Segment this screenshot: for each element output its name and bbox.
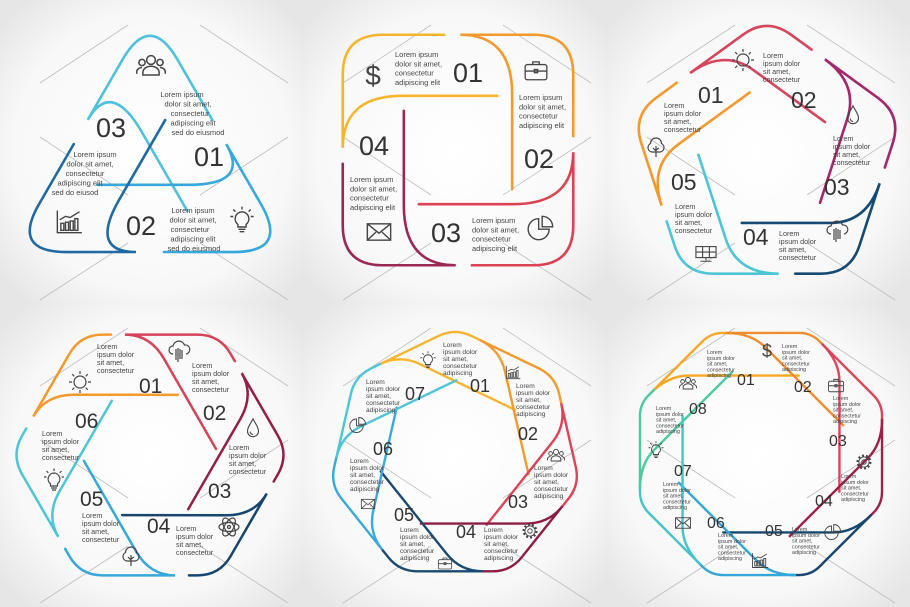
number 04: 04 xyxy=(147,515,171,538)
text block 02: ipsum dolor xyxy=(192,369,230,378)
number 07: 07 xyxy=(674,463,692,480)
text block 02: Lorem ipsum xyxy=(519,93,562,102)
text block 01: consectetur xyxy=(395,69,434,78)
text block 01: consectetur xyxy=(97,366,135,375)
text block 08: ipsum dolor xyxy=(656,412,684,418)
segment 02 orange xyxy=(710,305,870,425)
number 03: 03 xyxy=(508,492,528,512)
text block 04: ipsum dolor xyxy=(484,534,519,541)
text block 04: Lorem xyxy=(675,202,695,211)
text block 08: sit amet, xyxy=(656,418,677,424)
segment 08 green xyxy=(612,345,732,505)
text block 07: sit amet, xyxy=(366,393,391,400)
text block 02: ipsum dolor xyxy=(782,350,810,356)
text block 02: dolor sit amet, xyxy=(169,216,217,224)
text block 08: adipiscing xyxy=(656,429,680,435)
number 03: 03 xyxy=(208,480,231,503)
text block 02: sed do eiusmod xyxy=(168,244,220,253)
panel: pentagon cycle xyxy=(617,26,910,312)
segment 04 maroon xyxy=(421,465,577,594)
number 07: 07 xyxy=(405,384,425,404)
icon: sun xyxy=(732,49,754,71)
segment 01 orange xyxy=(12,312,178,463)
text block 03: adipiscing xyxy=(534,493,564,500)
text block 06: consectetur xyxy=(42,453,80,462)
text block 01: Lorem xyxy=(97,342,117,351)
segment 05 orange xyxy=(617,63,750,221)
text block 03: adipiscing elit xyxy=(57,178,103,188)
text block 08: consectetur xyxy=(656,423,684,429)
segment 04 navy xyxy=(122,447,288,598)
icon: briefcase xyxy=(438,558,452,569)
panel: square cycle xyxy=(296,0,620,312)
text block 02: ipsum dolor xyxy=(516,390,551,397)
segment 02 red xyxy=(98,298,264,449)
text block 05: sit amet, xyxy=(792,539,813,545)
number 01: 01 xyxy=(698,82,724,108)
number 04: 04 xyxy=(743,224,769,250)
text block 02: adipiscing elit xyxy=(170,234,216,244)
number 05: 05 xyxy=(765,523,783,540)
text block 04: ipsum dolor xyxy=(176,532,214,541)
number 06: 06 xyxy=(707,515,725,532)
text block 06: consectetur xyxy=(350,479,385,486)
text block 04: dolor sit amet, xyxy=(350,184,397,193)
segment 02 orange xyxy=(444,320,589,474)
number 02: 02 xyxy=(203,402,226,425)
text block 07: ipsum dolor xyxy=(663,488,691,494)
text block 05: ipsum dolor xyxy=(400,534,435,541)
text block 04: consectetur xyxy=(841,491,869,497)
segment 04 cyan xyxy=(642,155,807,312)
text block 02: consectetur xyxy=(171,225,210,234)
icon: solar panel xyxy=(696,247,716,261)
icon: chart xyxy=(57,210,82,233)
text block 08: Lorem xyxy=(656,406,672,412)
text block 02: dolor sit amet, xyxy=(519,102,566,111)
text block 06: Lorem xyxy=(42,429,62,438)
text block 01: adipiscing elit xyxy=(170,118,216,128)
text block 04: sit amet, xyxy=(675,218,702,227)
text block 03: Lorem xyxy=(779,229,799,238)
icon: chart xyxy=(752,553,768,568)
number 01: 01 xyxy=(139,375,162,398)
text block 05: ipsum dolor xyxy=(664,109,702,118)
icon: bulb xyxy=(420,351,436,368)
number 02: 02 xyxy=(524,144,554,174)
text block 01: Lorem xyxy=(443,342,462,349)
icon: dollar: $ xyxy=(365,60,381,91)
icon: atom xyxy=(219,516,239,538)
icon: drop xyxy=(848,106,858,124)
text block 04: sit amet, xyxy=(484,541,509,548)
text block 06: adipiscing xyxy=(718,556,742,562)
text block 03: ipsum dolor xyxy=(833,402,861,408)
text block 07: consectetur xyxy=(366,400,401,407)
text block 03: ipsum dolor xyxy=(779,237,817,246)
text block 02: consectetur xyxy=(516,404,551,411)
segment 03 red xyxy=(784,332,905,492)
text block 04: Lorem ipsum xyxy=(350,175,393,184)
text block 04: adipiscing xyxy=(484,555,514,562)
text block 02: Lorem xyxy=(782,344,798,350)
icon: bulb xyxy=(230,207,254,232)
text block 07: adipiscing xyxy=(366,407,396,414)
text block 01: consectetur xyxy=(707,367,735,373)
text block 03: consectetur xyxy=(779,253,817,262)
icon: pie xyxy=(350,418,366,432)
segment 03 red xyxy=(487,393,593,542)
text block 01: consectetur xyxy=(171,109,210,118)
icon: gear xyxy=(858,456,870,468)
text block 05: adipiscing xyxy=(792,550,816,556)
text block 07: consectetur xyxy=(663,499,691,505)
text block 03: dolor sit amet, xyxy=(66,160,114,168)
text block 03: consectetur xyxy=(229,467,267,476)
number 02: 02 xyxy=(518,424,538,444)
icon: envelope xyxy=(676,518,690,528)
segment 01 light blue xyxy=(88,36,212,211)
icon: gear xyxy=(524,525,536,537)
text block 01: adipiscing xyxy=(443,370,473,377)
text block 02: Lorem ipsum xyxy=(171,206,215,215)
text block 05: consectetur xyxy=(82,535,120,544)
text block 06: consectetur xyxy=(718,550,746,556)
text block 05: Lorem xyxy=(792,527,808,533)
text block 04: consectetur xyxy=(176,548,214,557)
number 02: 02 xyxy=(791,87,817,113)
text block 06: sit amet, xyxy=(718,545,739,551)
text block 02: adipiscing xyxy=(516,411,546,418)
text block 06: sit amet, xyxy=(42,445,69,454)
text block 01: adipiscing xyxy=(707,373,731,379)
number 03: 03 xyxy=(431,218,461,248)
text block 03: Lorem xyxy=(534,465,553,472)
text block 01: ipsum dolor xyxy=(763,59,801,68)
text block 04: Lorem xyxy=(841,474,857,480)
text block 06: Lorem xyxy=(718,533,734,539)
number 06: 06 xyxy=(75,410,98,433)
segment 04 maroon xyxy=(302,107,507,312)
number 08: 08 xyxy=(689,401,707,418)
icon: tree xyxy=(648,138,664,157)
text block 03: sit amet, xyxy=(534,479,559,486)
text block 05: sit amet, xyxy=(400,541,425,548)
text block 03: Lorem ipsum xyxy=(472,216,515,225)
text block 07: ipsum dolor xyxy=(366,386,401,393)
icon: bulb xyxy=(44,468,64,490)
text block 04: Lorem xyxy=(484,527,503,534)
text block 05: consectetur xyxy=(400,548,435,555)
text block 02: adipiscing xyxy=(782,367,806,373)
icon: briefcase xyxy=(525,62,547,80)
segment 03 red xyxy=(415,101,620,306)
text block 04: consectetur xyxy=(350,194,389,203)
text block 01: sed do eiusmod xyxy=(172,128,224,137)
text block 01: dolor sit amet, xyxy=(164,100,212,108)
icon: bulb xyxy=(648,441,664,458)
text block 05: Lorem xyxy=(664,101,684,110)
icon: envelope xyxy=(367,224,391,240)
text block 02: sit amet, xyxy=(782,356,803,362)
icon: chart xyxy=(506,366,520,379)
number 01: 01 xyxy=(194,142,224,172)
text block 04: sit amet, xyxy=(176,540,203,549)
icon: people xyxy=(679,377,697,389)
number 02: 02 xyxy=(794,379,812,396)
text block 02: Lorem xyxy=(516,383,535,390)
text block 05: consectetur xyxy=(664,125,702,134)
text block 05: ipsum dolor xyxy=(792,533,820,539)
panel: heptagon cycle xyxy=(311,320,593,600)
text block 02: consectetur xyxy=(782,361,810,367)
segment 07 cyan xyxy=(617,416,738,576)
panel: triangle cycle xyxy=(1,36,299,294)
text block 01: sit amet, xyxy=(763,67,790,76)
text block 03: sit amet, xyxy=(833,408,854,414)
segment 01 yellow xyxy=(296,0,501,199)
icon: cloud xyxy=(169,341,190,362)
number 04: 04 xyxy=(815,493,833,510)
text block 04: consectetur xyxy=(484,548,519,555)
text block 03: Lorem xyxy=(229,443,249,452)
text block 07: Lorem xyxy=(663,482,679,488)
text block 03: sit amet, xyxy=(779,245,806,254)
text block 02: Lorem xyxy=(833,134,853,143)
text block 04: sit amet, xyxy=(841,486,862,492)
text block 02: sit amet, xyxy=(833,150,860,159)
segment 05 blue xyxy=(36,461,202,607)
text block 03: consectetur xyxy=(833,413,861,419)
text block 06: ipsum dolor xyxy=(42,437,80,446)
text block 02: consectetur xyxy=(833,158,871,167)
text block 02: consectetur xyxy=(519,112,558,121)
text block 01: Lorem ipsum xyxy=(395,50,438,59)
text block 02: adipiscing elit xyxy=(519,121,565,130)
text block 05: Lorem xyxy=(400,527,419,534)
number 04: 04 xyxy=(456,522,476,542)
text block 01: sit amet, xyxy=(97,358,124,367)
text block 01: ipsum dolor xyxy=(97,350,135,359)
icon: sun xyxy=(69,371,91,393)
text block 04: ipsum dolor xyxy=(675,210,713,219)
text block 06: adipiscing xyxy=(350,486,380,493)
text block 04: ipsum dolor xyxy=(841,480,869,486)
icon: cloud rain xyxy=(827,221,848,242)
text block 04: Lorem xyxy=(176,524,196,533)
text block 01: sit amet, xyxy=(443,356,468,363)
icon: dollar: $ xyxy=(762,341,772,361)
number 01: 01 xyxy=(453,58,483,88)
segment 01 yellow xyxy=(639,310,799,431)
segment 06 cyan xyxy=(16,401,112,537)
icon: envelope xyxy=(361,499,375,509)
text block 03: Lorem xyxy=(833,396,849,402)
text block 02: ipsum dolor xyxy=(833,142,871,151)
segment 06 blue xyxy=(321,408,427,557)
text block 05: adipiscing xyxy=(400,555,430,562)
number 05: 05 xyxy=(80,488,103,511)
number 03: 03 xyxy=(829,433,847,450)
text block 03: consectetur xyxy=(534,486,569,493)
text block 01: Lorem xyxy=(763,51,783,60)
text block 06: ipsum dolor xyxy=(350,465,385,472)
text block 03: adipiscing xyxy=(833,419,857,425)
text block 03: sit amet, xyxy=(229,459,256,468)
icon: briefcase xyxy=(828,379,844,392)
text block 02: sit amet, xyxy=(192,377,219,386)
text block 07: Lorem xyxy=(366,379,385,386)
number 03: 03 xyxy=(824,174,850,200)
number 06: 06 xyxy=(373,439,393,459)
text block 05: sit amet, xyxy=(664,117,691,126)
icon: drop xyxy=(248,419,258,437)
text block 05: Lorem xyxy=(82,511,102,520)
text block 04: adipiscing xyxy=(841,497,865,503)
text block 01: ipsum dolor xyxy=(443,349,478,356)
text block 05: ipsum dolor xyxy=(82,519,120,528)
segment 01 red xyxy=(690,26,825,122)
number 04: 04 xyxy=(359,131,389,161)
segment 03 maroon xyxy=(188,373,284,509)
text block 05: consectetur xyxy=(792,544,820,550)
panel: hexagon cycle xyxy=(12,298,288,607)
text block 01: consectetur xyxy=(443,363,478,370)
text block 02: consectetur xyxy=(192,385,230,394)
text block 03: consectetur xyxy=(66,169,105,178)
text block 03: Lorem ipsum xyxy=(73,150,117,159)
text block 02: sit amet, xyxy=(516,397,541,404)
text block 06: sit amet, xyxy=(350,472,375,479)
icon: people xyxy=(137,56,165,75)
text block 01: dolor sit amet, xyxy=(395,59,442,68)
number 01: 01 xyxy=(737,372,755,389)
number 05: 05 xyxy=(394,505,414,525)
segment 07 cyan xyxy=(311,332,456,486)
number 02: 02 xyxy=(126,211,156,241)
segment 05 navy xyxy=(347,471,503,600)
text block 06: Lorem xyxy=(350,458,369,465)
text block 04: consectetur xyxy=(675,226,713,235)
text block 01: consectetur xyxy=(763,75,801,84)
segment 04 maroon xyxy=(790,403,910,563)
text block 03: ipsum dolor xyxy=(229,451,267,460)
text block 01: adipiscing elit xyxy=(395,78,441,87)
text block 01: sit amet, xyxy=(707,362,728,368)
segment 03 dark blue xyxy=(1,98,215,294)
segment 06 blue xyxy=(652,483,812,603)
text block 01: Lorem ipsum xyxy=(160,90,204,99)
text block 01: Lorem xyxy=(707,350,723,356)
text block 04: adipiscing elit xyxy=(350,203,396,212)
panel: octagon cycle xyxy=(612,305,910,603)
segment 05 navy xyxy=(723,477,883,598)
segment 03 navy xyxy=(742,144,907,301)
number 05: 05 xyxy=(671,169,697,195)
text block 03: adipiscing elit xyxy=(472,244,518,253)
icon: pie xyxy=(528,216,553,240)
text block 05: sit amet, xyxy=(82,527,109,536)
icon: pie xyxy=(825,524,840,540)
segment 02 orange xyxy=(409,0,614,193)
text block 03: sed do eiusod xyxy=(52,188,98,197)
text block 02: Lorem xyxy=(192,361,212,370)
text block 06: ipsum dolor xyxy=(718,539,746,545)
text block 01: ipsum dolor xyxy=(707,356,735,362)
segment 01 yellow xyxy=(380,332,515,410)
icon: tree xyxy=(123,547,139,566)
text block 03: ipsum dolor xyxy=(534,472,569,479)
text block 03: consectetur xyxy=(472,235,511,244)
number 03: 03 xyxy=(96,113,126,143)
text block 07: sit amet, xyxy=(663,494,684,500)
text block 03: dolor sit amet, xyxy=(472,225,519,234)
icon: people xyxy=(547,449,565,461)
number 01: 01 xyxy=(470,376,490,396)
text block 07: adipiscing xyxy=(663,505,687,511)
segment 02 blue xyxy=(85,98,299,294)
segment 02 magenta xyxy=(778,45,910,203)
